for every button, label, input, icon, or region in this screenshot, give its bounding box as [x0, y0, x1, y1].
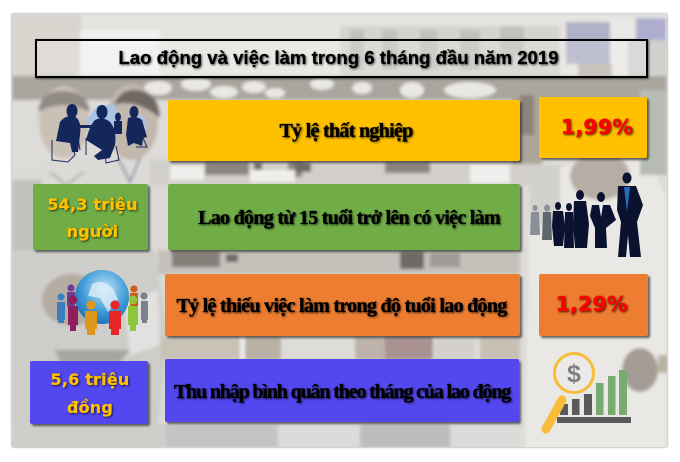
panel: income value: đồng	[67, 398, 113, 416]
icon: globe with coloured people	[57, 270, 148, 335]
panel: underemployment rate value: 1,29%	[555, 292, 628, 316]
panel: unemployment rate label	[168, 100, 520, 161]
panel: unemployment rate value: 1,99%	[561, 114, 633, 138]
panel: underemployment rate label: Tỷ lệ thiếu việc làm trong độ tuổi lao động	[176, 294, 507, 316]
panel: employed people label: Lao động từ 15 tuổi trở lên có việc làm	[198, 206, 500, 228]
panel: unemployment rate value	[539, 97, 647, 158]
panel: employed people label	[168, 184, 520, 250]
panel: underemployment rate value	[539, 274, 648, 336]
icon: people meeting at table	[52, 104, 148, 164]
title text: Lao động và việc làm trong 6 tháng đầu năm 2019	[118, 46, 559, 68]
icon: magnifier with dollar and bar chart	[542, 352, 631, 434]
panel: income value	[30, 361, 148, 424]
panel: unemployment rate label: Tỷ lệ thất nghiệp	[279, 120, 413, 142]
panel: employed people value	[33, 184, 148, 250]
panel: income label	[165, 359, 519, 422]
panel: employed people value: 54,3 triệu	[47, 195, 138, 214]
panel: income label: Thu nhập bình quân theo tháng của lao động	[174, 381, 510, 403]
title box	[35, 39, 648, 78]
panel: underemployment rate label	[165, 274, 520, 336]
icon: business people silhouettes	[530, 172, 643, 257]
panel: income value: 5,6 triệu	[50, 370, 129, 388]
panel: employed people value: người	[67, 222, 118, 241]
dollar sign: $	[567, 360, 581, 388]
